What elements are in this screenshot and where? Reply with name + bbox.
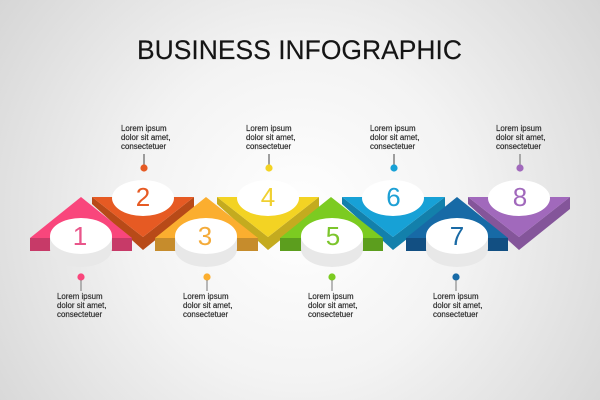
callout 1: Lorem ipsum [57,292,103,301]
step 3 disc and number: 3 [198,221,212,251]
step 5 disc and number [301,218,363,267]
callout 6: consectetuer [370,142,416,151]
step 8 disc and number [488,180,550,216]
step 5 arrow [280,197,383,251]
step 2 disc and number [112,180,174,216]
step 5 disc and number: 5 [326,221,340,251]
title: BUSINESS INFOGRAPHIC [137,35,462,65]
callout 4: dolor sit amet, [246,133,296,142]
step 4 arrow [217,197,319,250]
callout 1 [57,273,107,319]
step 2 arrow [92,197,194,250]
step 8 arrow [468,197,570,250]
callout 6 [370,124,420,172]
callout 1: consectetuer [57,310,103,319]
step 2 disc and number: 2 [136,182,150,212]
callout 5: Lorem ipsum [308,292,354,301]
step 1 disc and number: 1 [73,221,87,251]
callout 5: dolor sit amet, [308,301,358,310]
callout 4 [246,124,296,172]
step 7 disc and number [426,218,488,267]
callout 7: consectetuer [433,310,479,319]
step 8 disc and number: 8 [513,182,527,212]
callout 8: dolor sit amet, [496,133,546,142]
step 6 disc and number [362,180,424,216]
callout 4: consectetuer [246,142,292,151]
step 4 disc and number [237,180,299,216]
callout 1: dolor sit amet, [57,301,107,310]
callout 7 [433,273,483,319]
callout 7: Lorem ipsum [433,292,479,301]
step 7 disc and number: 7 [450,221,464,251]
callout 5: consectetuer [308,310,354,319]
callout 6: dolor sit amet, [370,133,420,142]
callout 3: consectetuer [183,310,229,319]
callout 6: Lorem ipsum [370,124,416,133]
step 3 arrow [155,197,258,251]
step 7 arrow [406,197,508,251]
step 1 arrow [30,197,132,251]
callout 8: Lorem ipsum [496,124,542,133]
callout 4: Lorem ipsum [246,124,292,133]
callout 8: consectetuer [496,142,542,151]
callout 2: consectetuer [121,142,167,151]
callout 2 [121,124,171,172]
step 4 disc and number: 4 [261,182,275,212]
step 6 disc and number: 6 [386,182,401,212]
callout 7: dolor sit amet, [433,301,483,310]
step 3 disc and number [175,218,237,267]
callout 5 [308,273,358,319]
callout 3: dolor sit amet, [183,301,233,310]
callout 8 [496,124,546,172]
step 6 arrow [342,197,445,250]
callout 2: dolor sit amet, [121,133,171,142]
callout 3 [183,273,233,319]
callout 3: Lorem ipsum [183,292,229,301]
callout 2: Lorem ipsum [121,124,167,133]
step 1 disc and number [50,218,112,267]
